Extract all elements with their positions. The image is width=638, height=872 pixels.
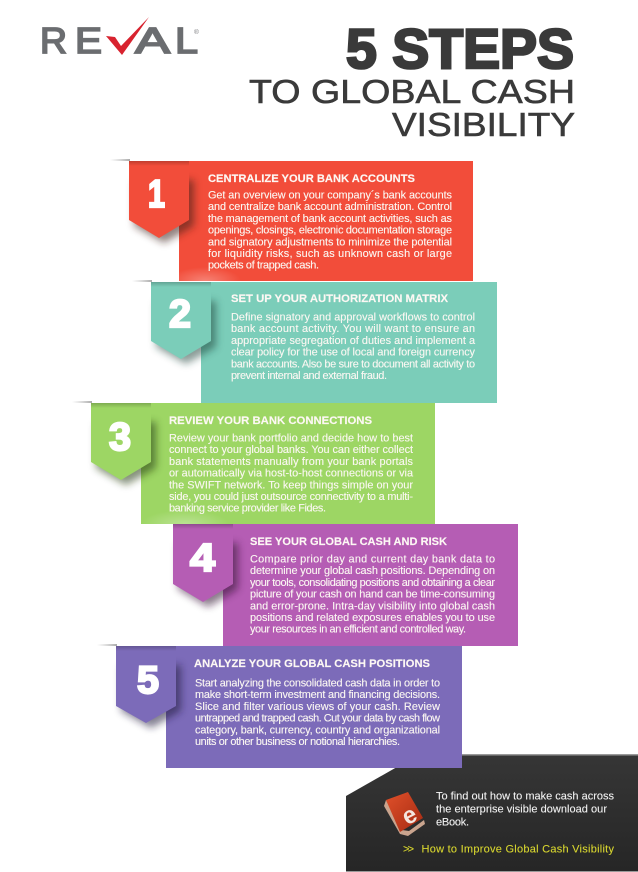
link: ebook title: How to Improve Global Cash Visibility xyxy=(422,844,614,856)
panel: step 5 xyxy=(97,644,462,768)
text block: step 5: untrapped and trapped cash. Cut your data by cash flow xyxy=(195,713,440,725)
text block: ebook invitation xyxy=(436,790,614,828)
text block: step 2: appropriate segregation of duties and implement a xyxy=(231,335,476,347)
title xyxy=(249,17,575,143)
link: ebook title: >> xyxy=(403,844,414,856)
text block: step 5: make short-term investment and financing decisions. xyxy=(195,689,440,701)
text block: step 1: openings, closings, electronic documentation storage xyxy=(208,225,452,237)
icon: ribbon 1 xyxy=(129,161,189,238)
text block: step 2: bank accounts. Also be sure to document all activity to xyxy=(231,358,475,370)
text block: step 4: picture of your cash on hand can be time-consuming xyxy=(250,589,495,601)
text block: ebook invitation: the enterprise visible download our xyxy=(436,804,607,816)
text block: step 4: Compare prior day and current day bank data to xyxy=(250,554,495,566)
icon: ebook: e xyxy=(397,801,422,831)
text block: step 5: Slice and filter various views of your cash. Review xyxy=(195,701,440,713)
text block: step 5 xyxy=(195,678,440,748)
text block: step 3: Review your bank portfolio and decide how to best xyxy=(169,432,413,444)
text block: step 1: for liquidity risks, such as unknown cash or large xyxy=(208,248,452,260)
text block: ebook invitation: To find out how to make cash across xyxy=(436,790,614,802)
text block: step 1: Get an overview on your company´s bank accounts xyxy=(208,190,453,202)
text block: step 5: Start analyzing the consolidated cash data in order to xyxy=(195,678,440,690)
logo: Reval: A xyxy=(135,20,170,61)
text block: step 4: and error-prone. Intra-day visibility into global cash xyxy=(250,600,495,612)
icon: ribbon 2: 2 xyxy=(169,293,191,336)
text block: step 1: the management of bank account activities, such as xyxy=(208,213,453,225)
heading: step 5: ANALYZE YOUR GLOBAL CASH POSITIONS xyxy=(194,658,431,670)
text block: step 3: banking service provider like Fides. xyxy=(169,503,326,515)
text block: step 2 xyxy=(231,312,476,382)
panel: step 3 xyxy=(72,401,435,538)
text block: step 1 xyxy=(208,190,453,272)
text block: step 3: the SWIFT network. To keep things simple on your xyxy=(169,479,413,491)
icon: ribbon 4 xyxy=(173,524,233,602)
icon: ribbon 4: 4 xyxy=(190,537,215,580)
text block: step 1: pockets of trapped cash. xyxy=(208,260,319,272)
heading: step 4: SEE YOUR GLOBAL CASH AND RISK xyxy=(250,536,447,548)
text block: step 3 xyxy=(169,432,414,515)
logo: Reval: R xyxy=(40,20,67,61)
heading: step 1: CENTRALIZE YOUR BANK ACCOUNTS xyxy=(208,173,416,185)
text block: step 4: positions and related exposures enables you to use xyxy=(250,612,495,624)
logo: Reval: E xyxy=(75,20,102,61)
icon: ribbon 3: 3 xyxy=(109,416,131,459)
text block: ebook invitation: eBook. xyxy=(436,816,469,828)
heading: step 2: SET UP YOUR AUTHORIZATION MATRIX xyxy=(231,293,449,305)
heading: step 3: REVIEW YOUR BANK CONNECTIONS xyxy=(169,415,373,427)
text block: step 3: bank statements manually from your bank portals xyxy=(169,456,414,468)
text block: step 5: category, bank, currency, country and organizational xyxy=(195,724,440,736)
text block: step 4 xyxy=(250,554,495,636)
text block: step 3: side, you could just outsource connectivity to a multi- xyxy=(169,491,413,503)
text block: step 3: or automatically via host-to-host connections or via xyxy=(169,468,414,480)
logo: Reval: L xyxy=(175,20,198,61)
text block: step 2: bank account activity. You will want to ensure an xyxy=(231,323,475,335)
title: TO GLOBAL CASH xyxy=(249,73,575,110)
text block: step 1: and centralize bank account administration. Control xyxy=(208,201,452,213)
icon: ribbon 3 xyxy=(91,403,151,480)
logo: Reval xyxy=(40,17,199,61)
text block: step 5: units or other business or notional hierarchies. xyxy=(195,736,400,748)
text block: step 2: clear policy for the use of local and foreign currency xyxy=(231,347,476,359)
icon: ebook xyxy=(384,792,425,836)
text block: step 2: prevent internal and external fraud. xyxy=(231,370,387,382)
panel: step 4 xyxy=(173,524,518,646)
text block: step 1: and signatory adjustments to minimize the potential xyxy=(208,236,452,248)
icon: ribbon 5: 5 xyxy=(137,659,159,702)
logo: Reval: ® xyxy=(194,28,199,36)
text block: step 4: your resources in an efficient and controlled way. xyxy=(250,624,466,636)
icon: ribbon 2 xyxy=(151,282,211,359)
panel: step 1 xyxy=(110,159,473,295)
icon: ribbon 1: 1 xyxy=(148,173,165,216)
text block: step 2: Define signatory and approval workflows to control xyxy=(231,312,475,324)
panel: ebook call to action xyxy=(346,754,638,872)
panel: step 2 xyxy=(132,280,497,403)
text block: step 3: connect to your global banks. You can either collect xyxy=(169,444,413,456)
title: VISIBILITY xyxy=(392,106,575,143)
title: 5 STEPS xyxy=(346,17,574,80)
text block: step 4: your tools, consolidating positions and obtaining a clear xyxy=(250,577,495,589)
icon: ribbon 5 xyxy=(116,646,176,723)
text block: step 4: determine your global cash positions. Depending on xyxy=(250,565,495,577)
